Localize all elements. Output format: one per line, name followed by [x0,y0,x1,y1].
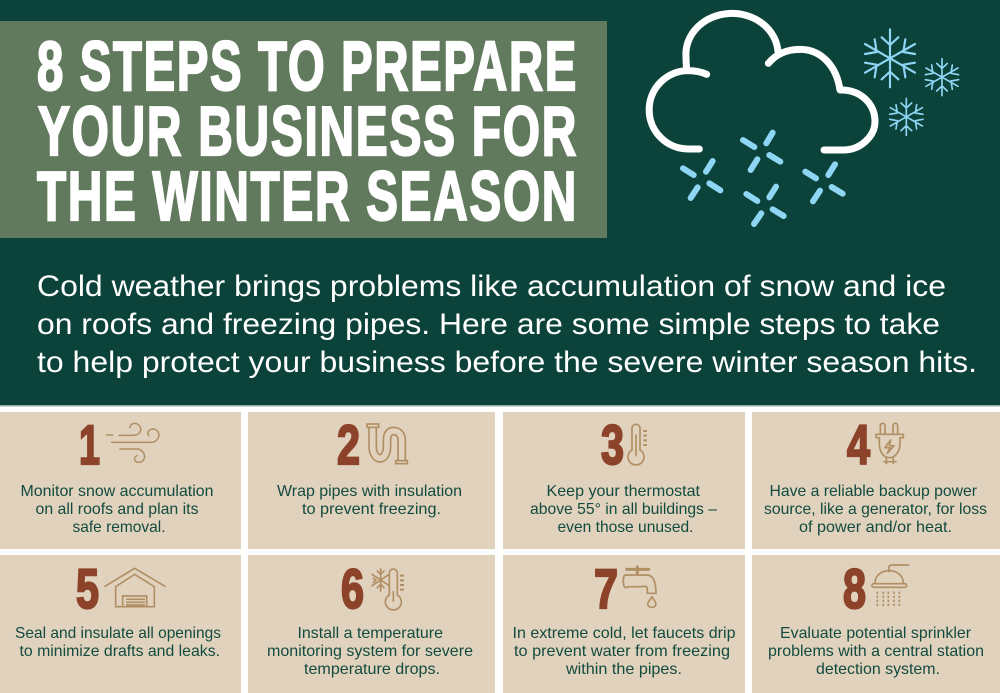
icon: wind [107,423,159,462]
step 4 card: of power and/or heat. [799,519,952,536]
step 7 card: In extreme cold, let faucets drip [512,625,736,642]
icon: large snowflake [865,29,915,87]
icon: cloud with snow [649,13,959,224]
step 6 card: temperature drops. [304,661,440,678]
icon: pipe [367,424,407,464]
step 4 card [752,412,1000,549]
step 2 card: 2 [337,413,360,476]
intro paragraph: to help protect your business before the severe winter season hits. [37,346,977,379]
title banner: YOUR BUSINESS FOR [38,92,578,170]
step 1 card: safe removal. [72,519,166,536]
icon: sprinkler head [872,565,909,608]
step 7 card [503,555,745,693]
step 1 card [0,412,241,549]
icon: snowflake thermometer [372,569,404,610]
icon: thermometer [628,424,647,465]
step 6 card: 6 [341,557,364,620]
step 8 card: Evaluate potential sprinkler [780,625,972,642]
step 1 card: 1 [79,413,100,476]
step 4 card: Have a reliable backup power [770,483,978,500]
icon: small snowflake lower [890,98,923,135]
step 8 card [752,555,1000,693]
step 6 card: monitoring system for severe [267,643,473,660]
step 5 card: to minimize drafts and leaks. [20,643,220,660]
step 5 card: Seal and insulate all openings [15,625,221,642]
icon: dripping faucet [623,567,656,607]
step 4 card: source, like a generator, for loss [764,501,987,518]
title banner: 8 STEPS TO PREPARE [37,27,578,105]
step 3 card: above 55° in all buildings – [530,501,717,518]
step 3 card: 3 [601,413,624,476]
intro paragraph [37,270,977,379]
icon: small snowflake right [925,59,959,96]
icon: plug [876,423,903,464]
step 4 card: 4 [847,413,870,476]
step 6 card: Install a temperature [298,625,443,642]
step 7 card: 7 [594,557,618,620]
header panel [0,0,1000,406]
step 8 card: detection system. [816,661,940,678]
step 3 card: Keep your thermostat [546,483,701,500]
step 1 card: Monitor snow accumulation [20,483,214,500]
step 6 card [248,555,495,693]
intro paragraph: on roofs and freezing pipes. Here are some simple steps to take [37,308,940,341]
step 2 card [248,412,495,549]
title banner [0,21,607,238]
step 8 card: problems with a central station [768,643,984,660]
intro paragraph: Cold weather brings problems like accumulation of snow and ice [37,270,946,303]
step 8 card: 8 [843,557,866,620]
step 7 card: to prevent water from freezing [514,643,730,660]
step 2 card: Wrap pipes with insulation [277,483,462,500]
step 5 card: 5 [76,557,99,620]
icon: garage [104,568,166,607]
step 7 card: within the pipes. [565,661,682,678]
step 1 card: on all roofs and plan its [36,501,198,518]
step 5 card [0,555,241,693]
step 3 card [503,412,745,549]
title banner: THE WINTER SEASON [37,157,578,235]
step 2 card: to prevent freezing. [302,501,441,518]
step 3 card: even those unused. [558,519,694,536]
